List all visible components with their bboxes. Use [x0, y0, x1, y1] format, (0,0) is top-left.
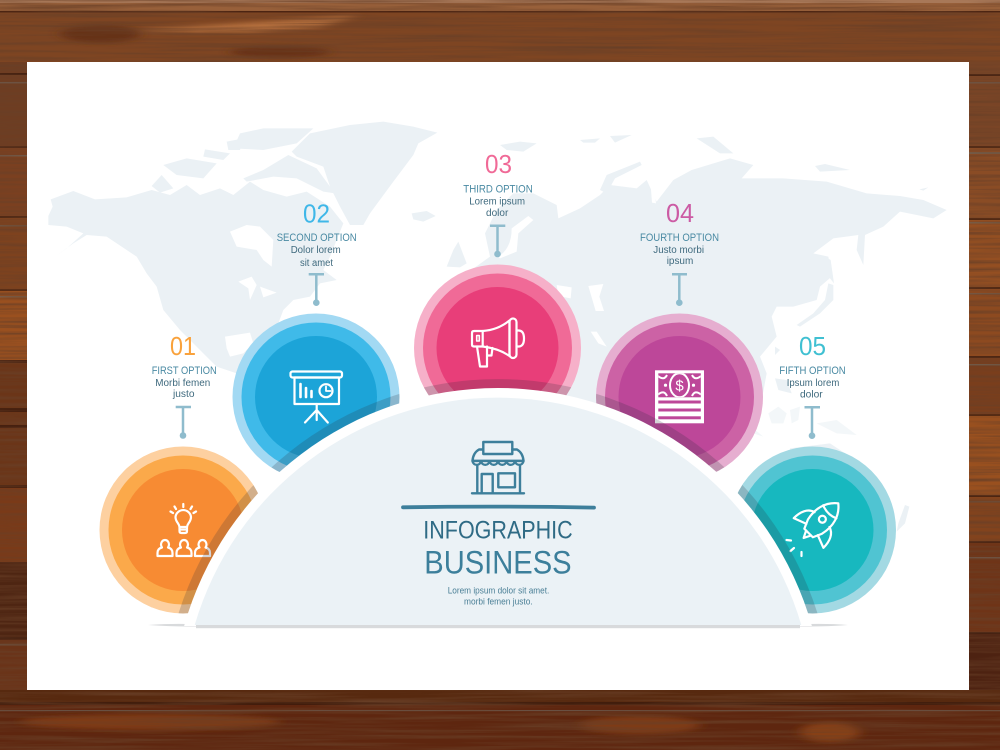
connector 2 [309, 274, 324, 306]
option 2 text [277, 232, 357, 269]
disc 3 [414, 264, 581, 432]
number 02: 02 [303, 198, 330, 228]
option 4 text: ipsum [667, 256, 693, 267]
subtitle text: morbi femen justo. [464, 597, 533, 608]
icon: banknote stack [655, 370, 704, 423]
connector 1 [176, 407, 191, 439]
disc 4 [596, 314, 763, 480]
option 5 text [779, 365, 846, 400]
option 5 text: FIFTH OPTION [779, 365, 846, 377]
heading underline [403, 505, 594, 510]
connector 3 [490, 226, 505, 257]
disc 5 [729, 446, 896, 614]
icon: presentation board [290, 372, 342, 422]
icon: rocket [786, 488, 853, 556]
connector 5 [804, 407, 820, 439]
number 04: 04 [666, 198, 694, 228]
option 2 text: Dolor lorem [291, 245, 341, 256]
option 4 text: Justo morbi [653, 245, 704, 256]
number 03: 03 [485, 149, 512, 179]
option 4 text [640, 232, 719, 267]
option 1 text: Morbi femen [155, 378, 210, 389]
option 2 text: sit amet [300, 258, 333, 269]
option 3 text: dolor [486, 208, 509, 219]
subtitle text: Lorem ipsum dolor sit amet. [448, 585, 549, 596]
option 4 [596, 198, 763, 480]
title: BUSINESS [424, 543, 572, 580]
option 5 [729, 331, 896, 614]
option 5 text: dolor [800, 389, 823, 400]
disc 2 [232, 314, 400, 480]
icon: megaphone [472, 318, 524, 366]
icon: storefront [472, 442, 524, 493]
option 2 text: SECOND OPTION [277, 232, 357, 244]
option 2 [232, 198, 400, 480]
connector 4 [672, 274, 687, 306]
option 3 text [463, 183, 533, 219]
option 3 text: THIRD OPTION [463, 183, 533, 195]
option 3 [414, 149, 581, 432]
icon: bulb and people [158, 504, 210, 556]
option 3 text: Lorem ipsum [469, 196, 525, 207]
central dome [184, 388, 812, 628]
subtitle text [448, 585, 549, 608]
white poster panel [27, 62, 969, 690]
option 1 text [152, 365, 217, 400]
option 1 [100, 331, 266, 614]
option 4 text: FOURTH OPTION [640, 232, 719, 244]
icon: banknote stack: $ [675, 378, 684, 394]
number 01: 01 [170, 331, 196, 361]
option 1 text: justo [172, 389, 195, 400]
number 05: 05 [799, 331, 826, 361]
disc 1 [100, 446, 266, 614]
option 1 text: FIRST OPTION [152, 365, 217, 377]
ground shadow [148, 624, 848, 626]
title: INFOGRAPHIC [423, 517, 573, 544]
option 5 text: Ipsum lorem [787, 378, 839, 389]
title [423, 517, 573, 580]
world map [48, 122, 947, 532]
